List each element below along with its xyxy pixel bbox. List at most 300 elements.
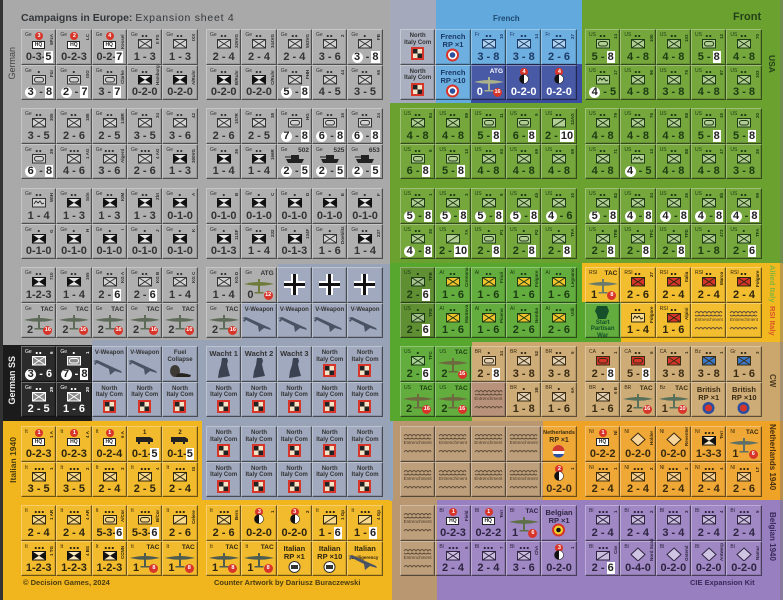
Gr inf 1-6: 3 [755, 351, 760, 354]
inf 5-8: 5 [283, 86, 289, 98]
French inf 2-6: 2 - 6 [548, 50, 570, 62]
panel: Belgian counters C7 [400, 505, 577, 576]
HQ 0-3-5: 5PzA [49, 34, 54, 45]
tank 2-5: - 5 [295, 165, 308, 177]
cavalry 2-6: 2 - 6 [592, 562, 614, 574]
inf 4-8: US [695, 146, 702, 152]
TAC 2-16: TAC [40, 306, 53, 312]
TAC 2-16: 16 [230, 327, 236, 333]
inf 2-6: 2 - 6 [733, 245, 755, 257]
inf 2-8: TFC [649, 228, 654, 237]
inf 3-6: 2 [340, 34, 345, 37]
AI 1-6 [506, 267, 541, 302]
static 0-2-0: 0-2-0 [211, 86, 237, 98]
North Italy Com: Italy Com [316, 472, 343, 478]
static 1-4 [241, 224, 277, 259]
cavalry 2-10: 2 - 10 [439, 245, 467, 257]
inf 2-8: 2 - 8 [662, 245, 684, 257]
Belgian RP x1: RP ×1 [549, 516, 570, 525]
armor 2-8: US [510, 226, 517, 232]
inf 2-6: KG A [120, 272, 125, 283]
static 0-1-3: Ge [210, 226, 217, 232]
North Italy Com [206, 382, 241, 417]
V-Weapon [92, 346, 127, 382]
Entrenchment: Entrenchment [510, 476, 538, 480]
static 1-3: Zbt [155, 193, 160, 200]
AI 2-6: Utili [570, 308, 575, 316]
static 1-3: Ge [96, 191, 102, 197]
SS armor 7-8: Ge [60, 349, 67, 355]
inf 5-8: 3 [464, 193, 469, 196]
TAC 1-8: It [131, 544, 134, 550]
static 0-1-0: D [305, 193, 310, 196]
North Italy Com: North [216, 466, 232, 472]
inf 4-6: Ge [60, 146, 67, 152]
inf 5-8: FHH [305, 70, 310, 79]
North Italy Com: North [172, 386, 188, 392]
inf 2-4: 4 [719, 510, 724, 513]
HQ 0-2-3: 1 [37, 430, 41, 436]
TAC 1-8: 8 [231, 565, 234, 571]
inf 3-6 [92, 144, 127, 179]
inf 2-5: 38 [270, 113, 275, 118]
inf 2-5 [241, 108, 277, 144]
HQ 0-2-3: Bl [439, 508, 444, 514]
panel: US counters C2 [400, 108, 577, 179]
inf 2-6: Ge [210, 111, 217, 117]
Entrenchment: Entrenchment [404, 440, 432, 445]
inf 2-6 [726, 224, 762, 259]
icon: cross marker [277, 267, 312, 302]
HQ 0-2-2: 0-2-2 [590, 448, 616, 460]
HQ 0-2-4 [92, 426, 127, 462]
inf 2-4: 2 - 4 [592, 483, 614, 495]
inf 3-6: 3 - 6 [513, 562, 535, 574]
right sheet edge [780, 0, 783, 600]
panel: German counters A1 [21, 29, 198, 100]
armored inf 3-8: FB [376, 34, 381, 40]
Entrenchment: Entrenchment [730, 316, 758, 322]
US inf 2-6 [400, 267, 435, 302]
inf 4-8: US [660, 146, 667, 152]
inf 2-4: 4 [719, 466, 724, 469]
ATG 0-12: 12 [265, 292, 271, 298]
static 1-2-3: 1-2-3 [26, 288, 52, 300]
armor 3-7: 3 - 7 [98, 86, 120, 98]
tank 2-5: Ge [316, 146, 323, 152]
HQ 0-2-3: HQ [35, 439, 42, 445]
inf 2-6: Ge [60, 111, 67, 117]
armor 5-8: 5 - 8 [592, 50, 614, 62]
RSI 2-4: 2 - 4 [698, 288, 720, 300]
armor 2-7: ISO [85, 70, 90, 77]
TAC 1-6: 1 [512, 526, 518, 538]
panel: German counters A2 [21, 108, 198, 179]
static 1-4 [56, 267, 92, 302]
inf 4-8: 89 [464, 113, 469, 118]
Italian Belligerency: Belligerency [352, 554, 378, 560]
inf 4-6: 4 - 6 [63, 165, 85, 177]
Bz inf 3-8: Bz [695, 349, 701, 355]
RSI TAC 1-8: 8 [610, 292, 613, 298]
armor 6-8: 9 [534, 113, 539, 116]
inf 2-4: 2 - 4 [592, 526, 614, 538]
inf 2-4 [726, 505, 762, 540]
inf 3-8: US [730, 146, 737, 152]
static 0-2-0: A/Ruhr [191, 70, 196, 84]
static 0-1-0: G [49, 228, 54, 232]
inf 3-8: 3 - 8 [733, 165, 755, 177]
inf 4-8: 4 - 8 [442, 130, 464, 142]
inf 4-8: 87 [719, 70, 724, 75]
inf 3-6: 3 - 6 [169, 130, 191, 142]
static 0-1-0: Ge [316, 191, 323, 197]
AI 1-6 [471, 302, 506, 338]
inf 1-3: Ge [166, 32, 173, 38]
static 0-1-0: H [85, 228, 90, 232]
TAC 1-8: 8 [267, 565, 270, 571]
inf 2-4: It [166, 464, 169, 470]
inf 2-6: Bers [234, 510, 239, 520]
BR armor 2-8: 2 - 8 [477, 368, 499, 380]
inf 2-4 [585, 505, 620, 540]
inf 5-8: Ge [281, 68, 287, 74]
North Italy Com [277, 462, 312, 497]
French RP x10: RP ×10 [440, 76, 466, 84]
North Italy Com: Italy Com [246, 436, 273, 442]
inf 5-8: - 8 [295, 86, 308, 98]
Dutch fort 0-2-0: 2 [558, 466, 561, 472]
static 0-1-0: B [234, 193, 239, 196]
TAC 2-16: 2 [62, 324, 68, 336]
French inf 2-6: Fr [545, 32, 550, 38]
AI 1-6: 1 - 6 [548, 288, 570, 300]
static 0-2-0: 0-2-0 [132, 86, 158, 98]
BR inf 3-8: BR [545, 349, 552, 355]
French inf 3-8: 3 - 8 [513, 50, 535, 62]
Wacht 3 [277, 346, 312, 382]
armor 5-8: US [475, 111, 482, 117]
panel background: RSI Italy [582, 263, 783, 302]
Italian RP x10: Italian [319, 544, 341, 552]
Gr inf 1-6: 1 - 6 [733, 368, 755, 380]
British RP x1 [691, 382, 726, 417]
AI 1-6: 1 - 6 [442, 288, 464, 300]
TAC 1-8: It [166, 544, 169, 550]
inf 4-8: - 8 [709, 210, 722, 222]
label: Italian 1940: Italian 1940 [8, 437, 18, 483]
inf 3-8: 103 [755, 70, 760, 77]
RSI 1-4: 1 - 4 [627, 324, 649, 336]
French RP x1: RP ×1 [443, 40, 463, 49]
TAC 2-16: 2 [27, 324, 33, 336]
inf 3-8: 3 - 8 [733, 86, 755, 98]
French RP x1 [435, 29, 471, 64]
AI 1-6: Piceno [499, 308, 504, 322]
inf 3-4 [656, 505, 691, 540]
static 1-2-3: 1-2-3 [26, 562, 52, 574]
static 0-1-0: 0-1-0 [282, 210, 307, 222]
North Italy Com: Italy Com [352, 472, 379, 478]
inf 3-4: 3 - 4 [662, 526, 684, 538]
armor 5-8: US [439, 146, 446, 152]
cavalry 1-6: 4 Gp [376, 510, 381, 520]
inf 4-8: 84 [428, 113, 433, 118]
inf 2-6: Ge [131, 270, 138, 276]
label: Allied Italy: Allied Italy [768, 265, 777, 303]
armor 2-7: Ge [60, 68, 67, 74]
inf 2-4: 2 - 4 [698, 483, 720, 495]
North Italy Com: Italy Com [281, 392, 308, 398]
HQ 0-2-4: 1 [108, 430, 111, 436]
French RP x10: French [440, 68, 466, 76]
TAC 2-16: 16 [80, 327, 86, 333]
North Italy Com: Italy Com [96, 392, 123, 398]
RSI 2-6: 2 - 6 [627, 288, 649, 300]
CA armor 5-8: 5 [649, 351, 654, 354]
static 0-1-0: K [191, 228, 196, 232]
TAC 1-8: TAC [182, 544, 195, 550]
inf 1-8: 1 - 8 [698, 245, 720, 257]
North Italy Com [206, 462, 241, 497]
mountain 4-5: - 5 [603, 86, 616, 98]
inf 4-8: 100 [649, 34, 654, 42]
North Italy Com [162, 382, 198, 417]
static 0-1-3 [206, 224, 241, 259]
North Italy Com: Italy Com [352, 436, 379, 442]
inf 4-8: 4 - 8 [698, 165, 720, 177]
panel: German counters B3 [206, 188, 383, 259]
US TAC 2-16: 16 [459, 406, 465, 412]
CA inf 3-8: CA [660, 349, 667, 355]
HQ 0-2-3: HQ [70, 439, 78, 445]
inf 3-6 [506, 540, 541, 576]
Entrenchment: Entrenchment [510, 440, 538, 445]
Entrenchment: Entrenchment [404, 476, 432, 480]
inf 2-6: US [730, 226, 737, 232]
RSI 1-4: Folgore [649, 306, 654, 322]
inf 3-8 [726, 144, 762, 179]
cavalry 2-10: US [439, 226, 446, 232]
panel background: German SS [3, 345, 92, 421]
panel: German counters A3 [21, 188, 198, 259]
static 0-1-0 [206, 188, 241, 224]
static 0-2-0: Ge [245, 68, 252, 74]
panel background: Italian lower [3, 500, 392, 600]
armored inf 3-8: 3 [354, 50, 360, 62]
AI 1-6 [435, 302, 471, 338]
inf 3-8: 3 - 8 [662, 86, 684, 98]
armor 7-8: 7 [283, 130, 289, 142]
RSI TAC 1-8: RSI [589, 270, 597, 276]
French inf 2-6: 27 [570, 34, 575, 39]
diamond 0-2-0: Bl [660, 544, 664, 550]
inf 2-5: 148R [120, 113, 125, 124]
static 0-1-0: 0-1-0 [211, 210, 237, 222]
inf 4-8: 70 [755, 34, 760, 39]
AI 1-6: 1 - 6 [477, 288, 499, 300]
truck 0-1-5: 1 [143, 430, 146, 436]
inf 4-8 [400, 224, 435, 259]
fort 0-2-0 [277, 505, 312, 540]
AI 2-6: 2 - 6 [513, 324, 535, 336]
panel: Allied Italy counters C4 [400, 267, 577, 338]
inf 2-4: 2 - 4 [477, 562, 499, 574]
TAC 2-16: 2 [168, 324, 174, 336]
panel background: Belgian entrenchment [392, 500, 437, 600]
US inf 2-6: US [404, 306, 411, 312]
label: Belgian 1940: Belgian 1940 [768, 512, 777, 561]
inf 3-5 [127, 108, 162, 144]
inf 1-3 [162, 29, 198, 64]
Entrenchment [506, 426, 541, 462]
diamond 0-2-0: 0-2-0 [696, 562, 722, 574]
inf 3-8: US [730, 68, 737, 74]
armor 5-8 [691, 108, 726, 144]
TAC 1-8: 1 [247, 562, 253, 574]
label: German: German [7, 47, 17, 80]
French fort 0-2-0 [506, 64, 541, 100]
panel background: Allied Italy green [390, 263, 621, 343]
North Italy Com: North [216, 430, 232, 436]
static 1-4: 165 [85, 272, 90, 280]
static 0-1-0 [347, 188, 383, 224]
RSI TAC 1-8: 1 [591, 288, 597, 300]
inf 2-4: It [25, 508, 28, 514]
North Italy Com: North [357, 466, 373, 472]
inf 2-6: 2 - 6 [733, 483, 755, 495]
inf 5-8: - 8 [603, 210, 616, 222]
inf 4-6: 10 [570, 193, 575, 198]
static 0-1-0: 0-1-0 [167, 210, 193, 222]
cavalry 2-10: US [545, 111, 552, 117]
TAC 1-6: Bl [510, 508, 514, 514]
inf 4-8: US [730, 191, 737, 197]
RSI 2-4: Folgore [755, 270, 760, 287]
Entrenchment [400, 505, 435, 540]
US inf 2-6: US [404, 270, 411, 276]
inf 2-4 [691, 462, 726, 497]
TAC 1-8: TAC [225, 544, 238, 550]
inf 2-8: 2 - 8 [548, 245, 570, 257]
static 1-4: 237 [376, 228, 381, 236]
static 1-3 [127, 188, 162, 224]
inf 2-4 [277, 29, 312, 64]
TAC 2-16 [206, 302, 241, 338]
armor 2-8 [471, 224, 506, 259]
inf 2-4: Nl [660, 464, 664, 470]
French inf 3-8: Fr [510, 32, 515, 38]
SS inf 2-5 [21, 382, 56, 417]
cavalry 2-10: 2 - 10 [545, 130, 573, 142]
ATG 0-12: ATG [260, 270, 274, 277]
inf 1-3: II FS [155, 34, 160, 44]
icon: cross marker [347, 267, 383, 302]
armor 5-8: 5 - 8 [477, 130, 499, 142]
HQ 0-2-3: 0-2-3 [440, 526, 466, 538]
static 1-4: Ge [210, 146, 217, 152]
inf 2-5 [127, 462, 162, 497]
panel background: steel North Italy block [202, 420, 392, 500]
panel: Netherlands markers C6 [400, 426, 577, 497]
US TAC 2-16 [435, 382, 471, 417]
inf 2-6 [726, 462, 762, 497]
inf 4-8: US [589, 111, 596, 117]
Bz inf 3-8 [691, 346, 726, 382]
inf 4-8: - 8 [639, 210, 651, 222]
inf 4-8: 4 [733, 210, 739, 222]
inf 4-8: 4 - 8 [627, 50, 649, 62]
inf 2-4: 2 - 4 [442, 562, 464, 574]
mountain 4-5: 13 [649, 148, 654, 154]
TAC 1-6: 6 [752, 450, 755, 456]
mountain 4-5 [585, 64, 620, 100]
static 0-1-0 [56, 224, 92, 259]
armor 3-7: Clarke [120, 70, 125, 83]
inf 3-5: 1 [49, 466, 54, 469]
SS inf 3-6: - 6 [39, 368, 52, 380]
inf 2-8 [656, 224, 691, 259]
inf 3-6: Ge [96, 146, 102, 152]
tank 2-5: 2 [319, 165, 325, 177]
static 1-2-3: 1-2-3 [97, 562, 122, 574]
TAC 1-8: It [245, 544, 248, 550]
inf 2-4: Ge [281, 32, 287, 38]
static 1-3: Ge [166, 146, 173, 152]
inf 4-8: US [545, 146, 552, 152]
BR TAC 2-16: 16 [644, 406, 650, 412]
diamond 0-2-0: 0-2-0 [731, 562, 757, 574]
HQ 0-2-3: 4 A [85, 431, 90, 438]
inf 2-8: US [660, 226, 667, 232]
inf 2-5: Ge [245, 111, 252, 117]
SS inf 1-6 [56, 382, 92, 417]
static 1-2-3: 1 TG [49, 546, 54, 556]
inf 2-6: 2 - 6 [98, 288, 120, 300]
diamond 0-4-0: Nord Scad [649, 538, 654, 560]
French inf 3-8: Fr [475, 32, 479, 38]
armor 6-8 [400, 144, 435, 179]
mountain 4-5: 4 [627, 165, 633, 177]
inf 4-8: US [624, 191, 631, 197]
inf 1-3 [127, 29, 162, 64]
TAC 2-16: TAC [111, 306, 124, 312]
inf 4-8: 34 [649, 193, 654, 198]
inf 2-4: 2 - 4 [28, 526, 50, 538]
North Italy Com [347, 462, 383, 497]
inf 4-8: 79 [613, 113, 618, 118]
HQ 0-2-4: 0-2-4 [97, 448, 122, 460]
CA armor 2-8: 2 - 8 [592, 368, 614, 380]
TAC 2-16 [92, 302, 127, 338]
inf 3-8: 75 [684, 70, 689, 75]
inf 2-6: Nl [730, 464, 735, 470]
North Italy Com [277, 426, 312, 462]
BR inf 1-6 [541, 382, 577, 417]
armor 5-8: 10 [719, 113, 724, 118]
inf 2-4: It [60, 508, 63, 514]
inf 4-8: US [730, 32, 737, 38]
BR TAC 2-16: BR [624, 384, 631, 390]
TAC 2-16: TAC [76, 306, 89, 312]
BR inf 1-8: 1 - 8 [513, 403, 535, 415]
North Italy Com: North [357, 350, 373, 356]
inf 2-4: Bl [624, 508, 629, 514]
static 0-1-0 [127, 224, 162, 259]
armor 3-8: Für [49, 70, 54, 77]
diamond 0-2-0: Antwerp [719, 542, 724, 560]
inf 4-8: 4 - 8 [548, 165, 570, 177]
